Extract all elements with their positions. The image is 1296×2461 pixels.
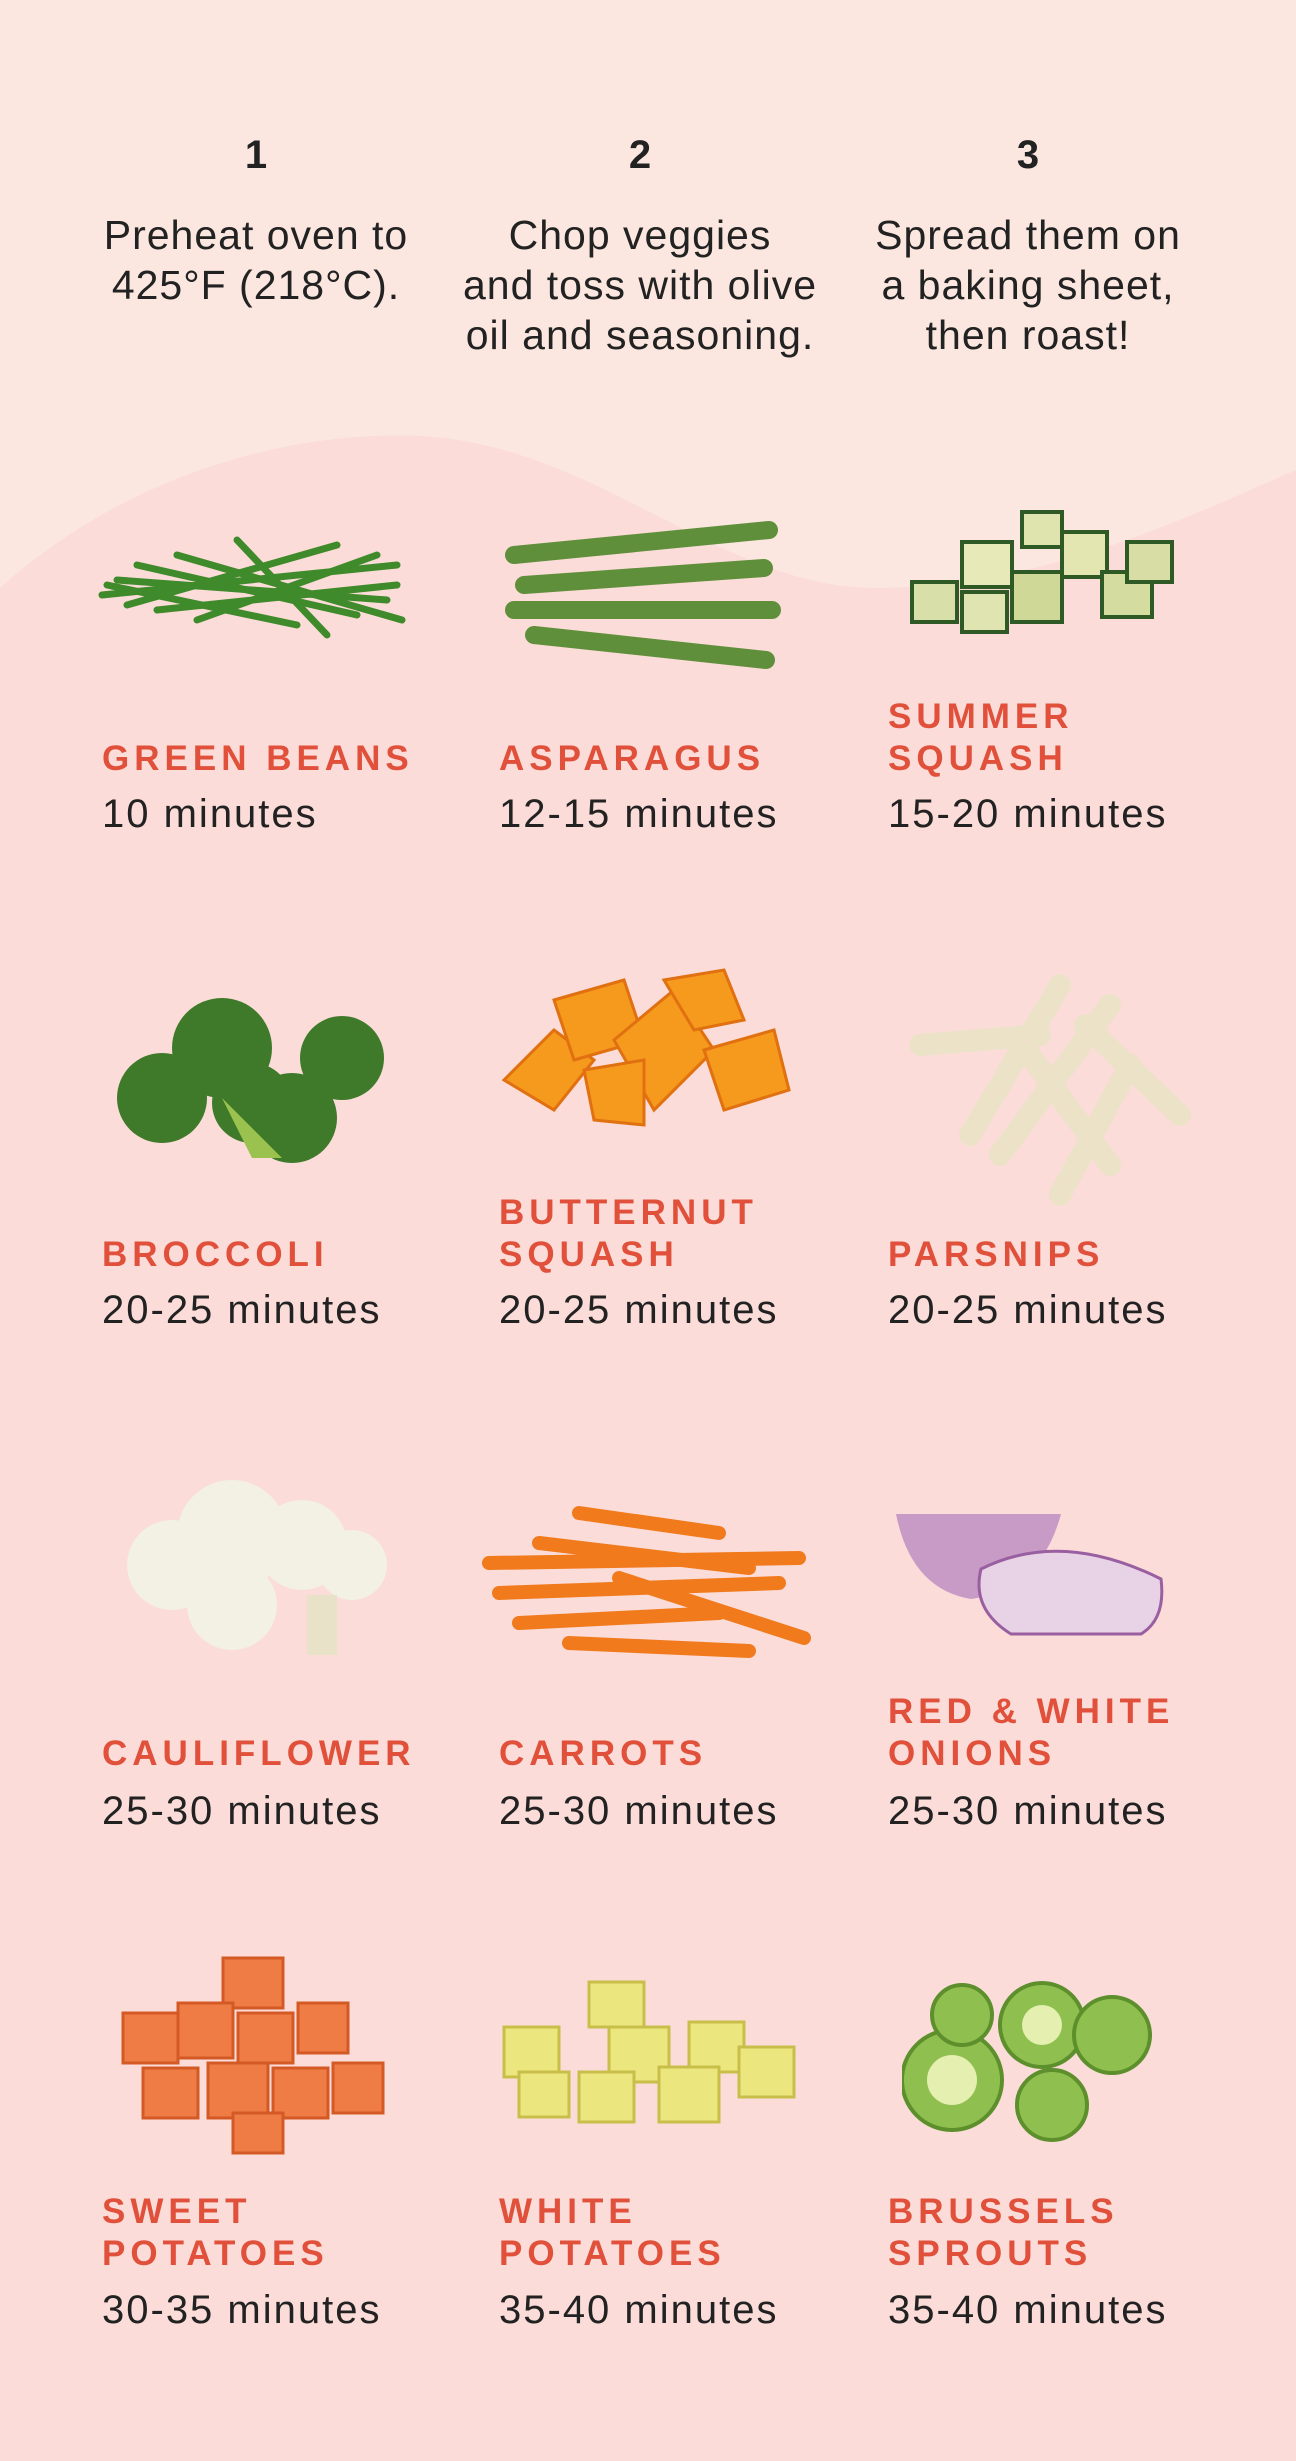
step 1: 1 (245, 133, 267, 177)
step 2: Chop veggies (509, 212, 771, 258)
icon: asparagus (505, 521, 781, 669)
item: white potatoes: POTATOES (499, 2234, 726, 2273)
item: butternut squash: 20-25 minutes (499, 1288, 778, 1332)
item: butternut squash: SQUASH (499, 1235, 679, 1274)
icon: green beans (98, 536, 406, 638)
item: green beans: 10 minutes (102, 792, 318, 836)
item: summer squash: SQUASH (888, 739, 1068, 778)
step 1: Preheat oven to (104, 212, 408, 258)
item: carrots: 25-30 minutes (499, 1789, 778, 1833)
item: carrots: CARROTS (499, 1734, 707, 1773)
item: onions (888, 1692, 1174, 1833)
icon: carrots (482, 1506, 811, 1658)
step 2 (463, 133, 817, 358)
item: white potatoes: 35-40 minutes (499, 2288, 778, 2332)
step 1: 425°F (218°C). (112, 262, 400, 308)
item: onions: ONIONS (888, 1734, 1056, 1773)
icon: onions (896, 1514, 1164, 1636)
item: carrots (499, 1734, 778, 1833)
icon: brussels sprouts (902, 1981, 1152, 2142)
item: cauliflower: 25-30 minutes (102, 1789, 381, 1833)
icon: cauliflower (127, 1480, 387, 1655)
step 3: a baking sheet, (881, 262, 1175, 308)
item: broccoli: 20-25 minutes (102, 1288, 381, 1332)
item: brussels sprouts: SPROUTS (888, 2234, 1092, 2273)
icon: sweet potatoes (122, 1956, 384, 2154)
item: butternut squash (499, 1193, 778, 1332)
item: onions: RED & WHITE (888, 1692, 1174, 1731)
item: cauliflower: CAULIFLOWER (102, 1734, 416, 1773)
item: summer squash: 15-20 minutes (888, 792, 1167, 836)
item: green beans: GREEN BEANS (102, 739, 414, 778)
item: brussels sprouts: 35-40 minutes (888, 2288, 1167, 2332)
icon: white potatoes (502, 1980, 796, 2124)
step 3: 3 (1017, 133, 1039, 177)
step 1 (104, 133, 408, 308)
item: white potatoes: WHITE (499, 2192, 637, 2231)
item: parsnips: PARSNIPS (888, 1235, 1104, 1274)
item: asparagus: ASPARAGUS (499, 739, 765, 778)
item: parsnips: 20-25 minutes (888, 1288, 1167, 1332)
item: brussels sprouts (888, 2192, 1167, 2332)
step 3: then roast! (926, 312, 1130, 358)
item: sweet potatoes (102, 2192, 381, 2332)
item: broccoli (102, 1235, 381, 1332)
item: white potatoes (499, 2192, 778, 2332)
item: summer squash: SUMMER (888, 697, 1074, 736)
step 2: and toss with olive (463, 262, 817, 308)
step 3: Spread them on (875, 212, 1181, 258)
item: sweet potatoes: POTATOES (102, 2234, 329, 2273)
icon: summer squash (910, 510, 1174, 634)
icon: parsnips (910, 974, 1191, 1206)
item: asparagus: 12-15 minutes (499, 792, 778, 836)
step 2: 2 (629, 133, 651, 177)
item: cauliflower (102, 1734, 416, 1833)
step 3 (875, 133, 1181, 358)
item: parsnips (888, 1235, 1167, 1332)
step 2: oil and seasoning. (466, 312, 814, 358)
item: butternut squash: BUTTERNUT (499, 1193, 758, 1232)
icon: broccoli (117, 998, 384, 1163)
icon: butternut squash (502, 968, 791, 1127)
item: brussels sprouts: BRUSSELS (888, 2192, 1119, 2231)
item: sweet potatoes: SWEET (102, 2192, 251, 2231)
item: summer squash (888, 697, 1167, 836)
item: asparagus (499, 739, 778, 836)
item: onions: 25-30 minutes (888, 1789, 1167, 1833)
item: green beans (102, 739, 414, 836)
item: broccoli: BROCCOLI (102, 1235, 329, 1274)
item: sweet potatoes: 30-35 minutes (102, 2288, 381, 2332)
